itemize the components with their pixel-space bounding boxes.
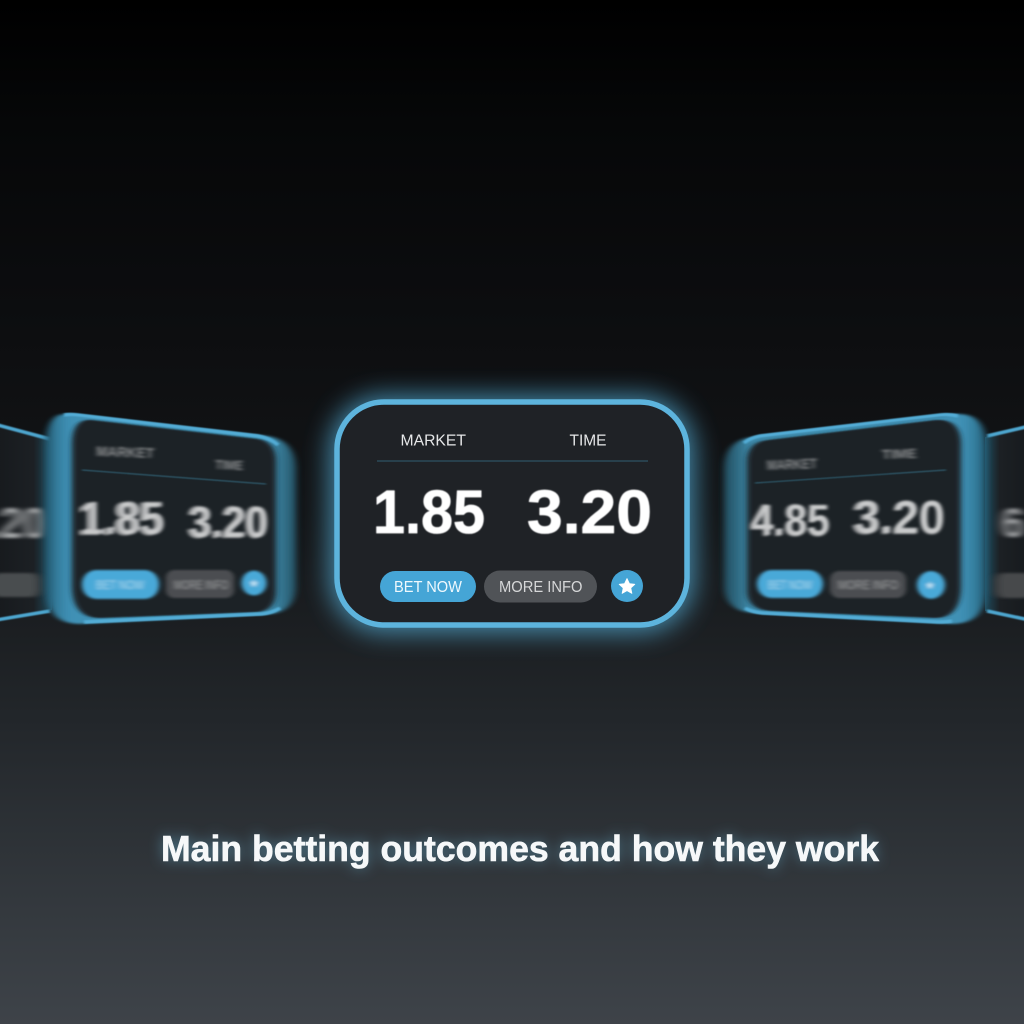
left card buttons — [82, 570, 266, 599]
left card face — [72, 420, 276, 618]
right card — [724, 414, 987, 624]
left card labels — [96, 443, 244, 473]
right card top and bottom highlights — [744, 415, 958, 622]
right card labels: MARKET — [767, 455, 817, 473]
left card buttons: ★ — [249, 578, 259, 590]
left card labels: MARKET — [96, 443, 155, 461]
more info button — [484, 570, 597, 602]
right card odds: 3.20 — [851, 491, 945, 544]
left card odds — [76, 492, 269, 548]
far right card — [985, 425, 1024, 621]
right card odds: 4.85 — [749, 495, 829, 546]
left card top and bottom highlights — [64, 414, 280, 622]
right card buttons: ★ — [925, 580, 935, 592]
right card odds — [749, 491, 945, 546]
left card odds: 1.85 — [81, 492, 165, 544]
center card labels: MARKET — [400, 432, 466, 450]
left card buttons: MORE INFO — [174, 578, 228, 592]
left card buttons: BET NOW — [96, 578, 145, 592]
right card odds: 3.20 — [855, 491, 945, 543]
left card divider — [82, 470, 266, 484]
center card odds — [373, 478, 652, 546]
center card labels — [400, 432, 606, 450]
center card labels: TIME — [570, 432, 606, 450]
center card — [337, 402, 687, 625]
center card divider — [377, 460, 648, 462]
left card — [45, 414, 296, 624]
right card frame — [724, 414, 987, 624]
left card odds: 3.20 — [190, 498, 269, 547]
right card buttons: BET NOW — [768, 578, 813, 592]
left card frame — [45, 414, 296, 624]
right card buttons: MORE INFO — [838, 578, 898, 592]
title: Main betting outcomes and how they work — [161, 828, 880, 869]
right card face — [747, 420, 961, 618]
icon: star button — [611, 570, 643, 602]
center card odds: 3.20 — [527, 478, 652, 546]
right card buttons — [757, 570, 945, 599]
left card labels: TIME — [215, 457, 244, 473]
left card odds: 3.20 — [186, 497, 266, 548]
far left card — [0, 423, 52, 621]
right card labels — [767, 446, 917, 473]
bet now button: BET NOW — [394, 579, 462, 596]
more info button: MORE INFO — [499, 579, 582, 596]
far right card: 6 — [1001, 499, 1024, 546]
center card odds: 1.85 — [373, 478, 485, 546]
bet now button — [380, 571, 476, 602]
left card odds: 1.85 — [76, 492, 161, 545]
right card labels: TIME — [882, 446, 917, 462]
center card glow — [330, 396, 694, 632]
title: Main betting outcomes and how they work — [161, 828, 880, 869]
center card frame — [337, 402, 687, 625]
right card odds: 4.85 — [752, 496, 830, 545]
right card divider — [755, 470, 946, 483]
